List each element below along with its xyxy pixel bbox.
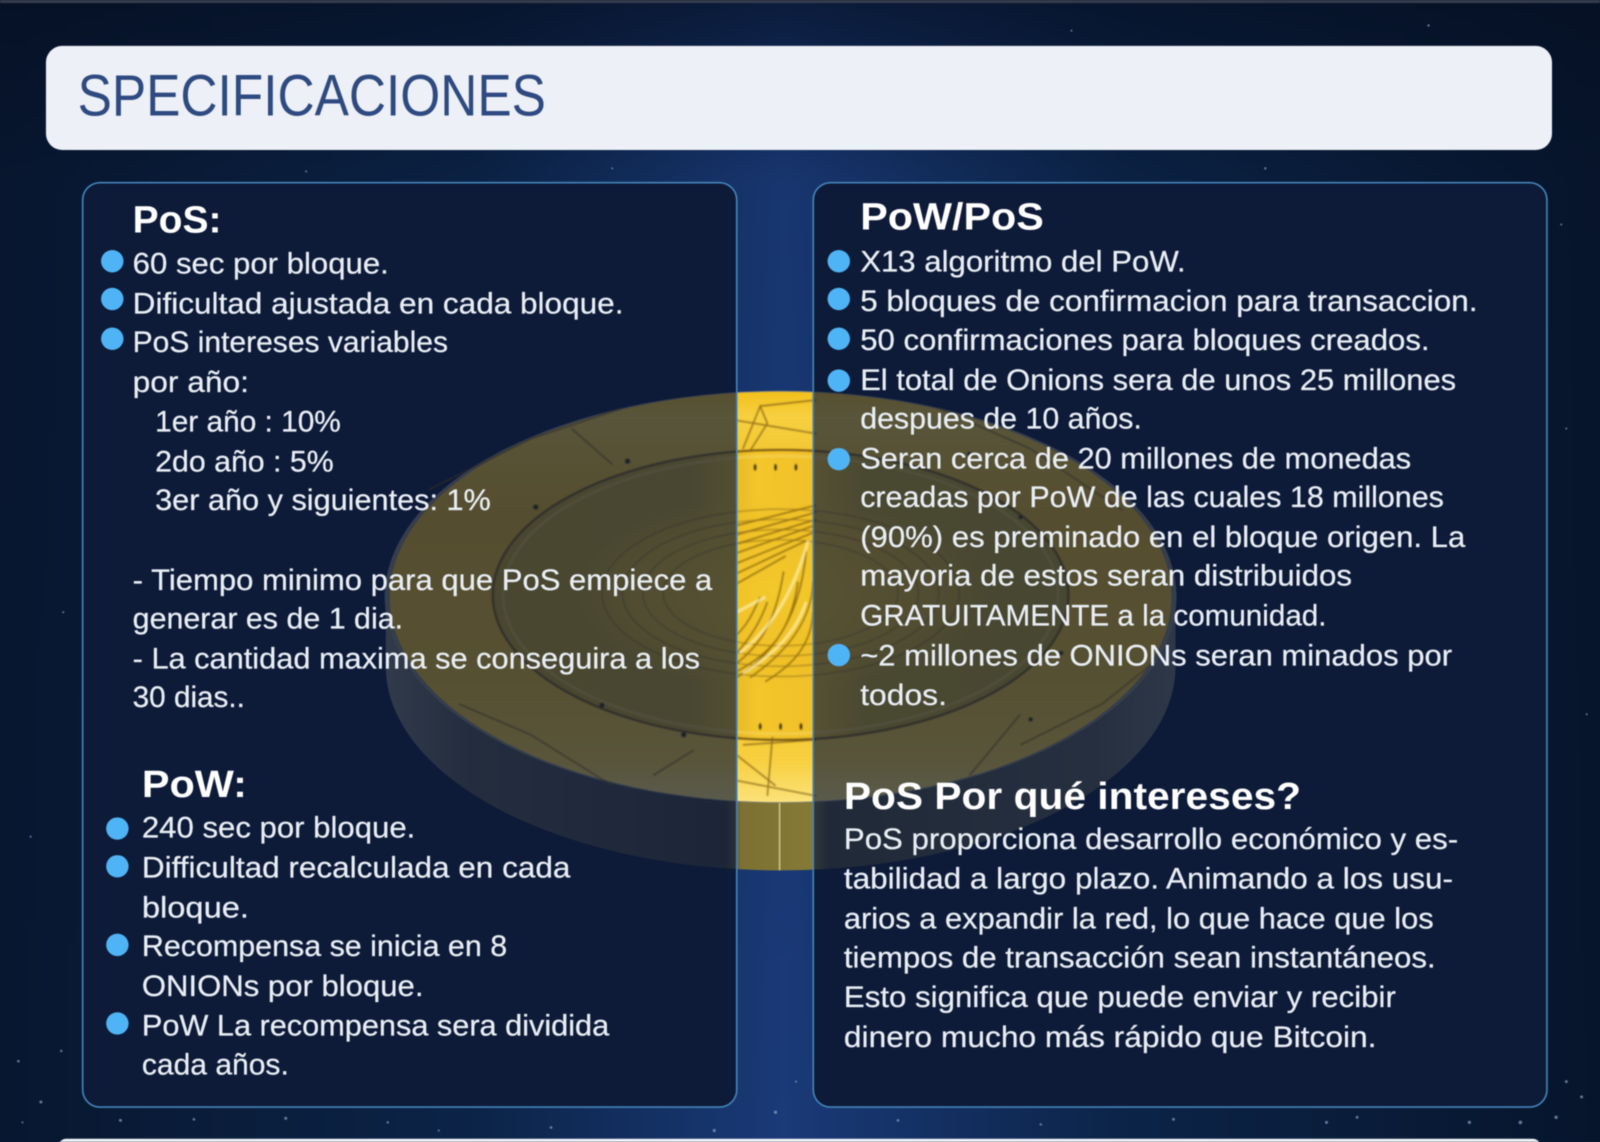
panel: PoW/PoS and interest bbox=[813, 183, 1547, 1107]
list: PoW specifications: ONIONs por bloque. bbox=[142, 970, 423, 1003]
list: PoS specifications: por año: bbox=[133, 366, 249, 399]
list: PoS specifications: - La cantidad maxima se conseguira a los bbox=[133, 642, 700, 675]
list: PoW/PoS specifications: ~2 millones de ONIONs seran minados por bbox=[860, 639, 1452, 672]
list: PoS specifications: generar es de 1 dia. bbox=[133, 603, 403, 636]
heading: PoS: PoS: bbox=[133, 199, 221, 241]
list: PoS specifications: - Tiempo minimo para que PoS empiece a bbox=[133, 564, 713, 597]
list: PoW specifications: bloque. bbox=[142, 891, 249, 924]
list: PoS specifications: PoS intereses variables bbox=[133, 326, 448, 359]
list: PoW/PoS specifications: todos. bbox=[860, 679, 947, 712]
text block: interest explanation: tabilidad a largo plazo. Animando a los usu- bbox=[844, 863, 1453, 896]
text block: interest explanation: PoS proporciona desarrollo económico y es- bbox=[844, 823, 1458, 856]
text block: interest explanation bbox=[844, 823, 1458, 1054]
text block: interest explanation: Esto significa que puede enviar y recibir bbox=[844, 981, 1396, 1014]
list: PoS specifications: 3er año y siguientes: 1% bbox=[155, 484, 491, 517]
list: PoW/PoS specifications: X13 algoritmo del PoW. bbox=[860, 245, 1186, 278]
list: PoW/PoS specifications: El total de Onions sera de unos 25 millones bbox=[860, 364, 1456, 397]
list: PoS specifications: 30 dias.. bbox=[133, 681, 245, 714]
list: PoS specifications: 2do año : 5% bbox=[155, 445, 334, 478]
list: PoW specifications bbox=[106, 812, 610, 1081]
heading: PoS Por qué intereses: PoS Por qué intereses? bbox=[844, 775, 1301, 817]
header bar bbox=[46, 46, 1552, 150]
panel: PoS and PoW bbox=[83, 183, 737, 1107]
next section bar edge bbox=[58, 1139, 1541, 1142]
text block: interest explanation: tiempos de transacción sean instantáneos. bbox=[844, 941, 1436, 974]
heading: PoW/PoS: PoW/PoS bbox=[860, 196, 1044, 238]
list: PoW/PoS specifications: GRATUITAMENTE a la comunidad. bbox=[860, 599, 1327, 632]
list: PoW/PoS specifications: Seran cerca de 20 millones de monedas bbox=[860, 442, 1411, 475]
list: PoW/PoS specifications: (90%) es preminado en el bloque origen. La bbox=[860, 521, 1466, 554]
list: PoW/PoS specifications bbox=[828, 245, 1478, 712]
list: PoW specifications: 240 sec por bloque. bbox=[142, 812, 415, 845]
list: PoS specifications: 60 sec por bloque. bbox=[133, 247, 389, 280]
list: PoS specifications: Dificultad ajustada en cada bloque. bbox=[133, 287, 623, 320]
list: PoW/PoS specifications: creadas por PoW de las cuales 18 millones bbox=[860, 481, 1444, 514]
list: PoW/PoS specifications: 50 confirmaciones para bloques creados. bbox=[860, 324, 1430, 357]
list: PoS specifications bbox=[101, 247, 713, 714]
list: PoW/PoS specifications: 5 bloques de confirmacion para transaccion. bbox=[860, 285, 1478, 318]
text block: interest explanation: arios a expandir la red, lo que hace que los bbox=[844, 903, 1434, 936]
heading: PoW: PoW: bbox=[142, 763, 247, 805]
list: PoW specifications: Recompensa se inicia en 8 bbox=[142, 930, 507, 963]
list: PoW/PoS specifications: mayoria de estos seran distribuidos bbox=[860, 560, 1352, 593]
list: PoW specifications: PoW La recompensa sera dividida bbox=[142, 1010, 610, 1043]
list: PoW specifications: Difficultad recalculada en cada bbox=[142, 852, 571, 885]
list: PoW/PoS specifications: despues de 10 años. bbox=[860, 403, 1142, 436]
text block: interest explanation: dinero mucho más rápido que Bitcoin. bbox=[844, 1021, 1377, 1054]
list: PoS specifications: 1er año : 10% bbox=[155, 406, 341, 439]
gold coin illustration bbox=[385, 391, 1177, 870]
title: SPECIFICACIONES bbox=[78, 63, 546, 128]
list: PoW specifications: cada años. bbox=[142, 1048, 289, 1081]
